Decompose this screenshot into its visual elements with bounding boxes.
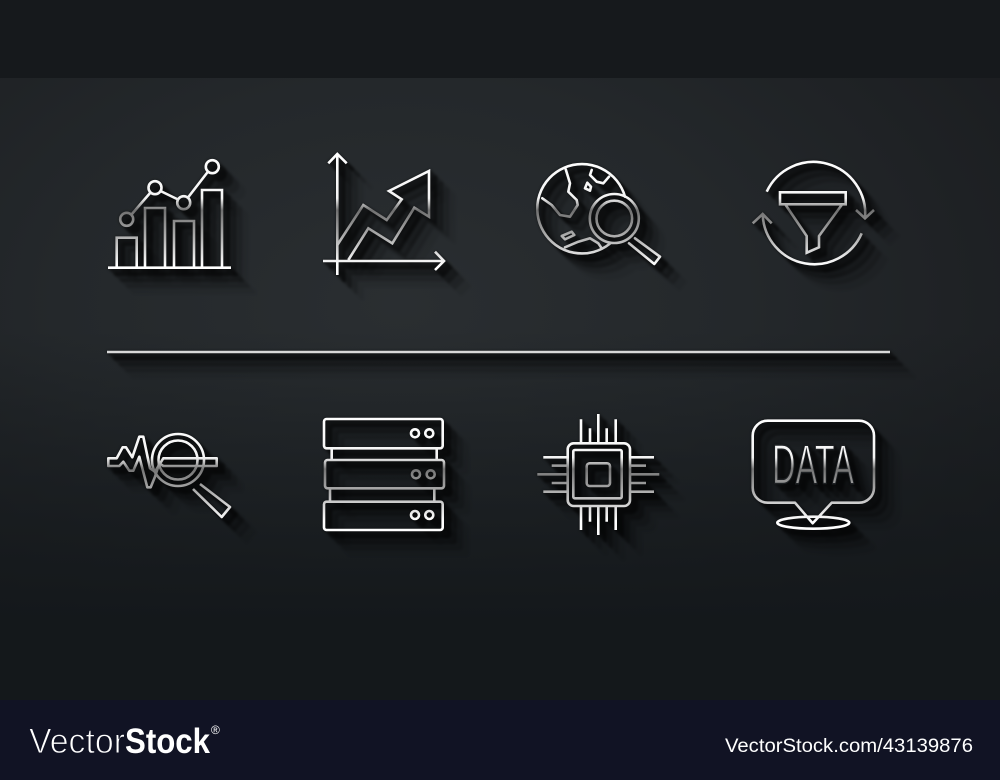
trend line <box>132 172 208 214</box>
image id: VectorStock.com/43139876 <box>725 735 973 757</box>
base ellipse <box>777 517 849 529</box>
icon: globe with magnifier <box>537 164 660 264</box>
cycle arrow top <box>767 162 874 218</box>
footer strip <box>0 622 1000 700</box>
bubble outline <box>753 421 874 523</box>
horizontal axis <box>323 252 444 270</box>
continents <box>542 169 609 248</box>
vertical axis <box>328 154 347 275</box>
server unit middle <box>325 460 444 488</box>
divider line <box>107 351 890 353</box>
connectors <box>330 448 437 502</box>
icon: processor chip <box>537 414 659 535</box>
bubble label: DATA <box>772 432 854 495</box>
globe outline <box>537 164 625 253</box>
brand logo: ® <box>211 723 220 737</box>
icon: growth arrow on axes <box>323 154 444 275</box>
server unit bottom <box>324 502 443 530</box>
footer banner <box>0 700 1000 780</box>
funnel <box>780 192 846 253</box>
pulse wave <box>108 437 217 487</box>
baseline <box>108 266 231 269</box>
top band <box>0 0 1000 78</box>
icon: server stack <box>324 419 444 530</box>
icon: DATA speech bubble <box>753 421 874 529</box>
chip pins <box>537 414 659 535</box>
brand logo: Vector <box>29 722 125 761</box>
brand logo: Stock <box>125 722 210 761</box>
rising arrow <box>337 171 429 260</box>
trend points <box>120 160 219 226</box>
bars <box>117 190 222 268</box>
cycle arrow bottom <box>753 214 862 264</box>
magnifier <box>152 434 230 517</box>
server unit top <box>324 419 443 448</box>
main background panel <box>0 78 1000 700</box>
icon: magnifier over pulse wave <box>108 434 230 517</box>
icon: bar chart with trend line <box>108 160 231 268</box>
magnifier <box>590 194 660 264</box>
chip body <box>568 443 630 506</box>
icon: funnel with refresh arrows <box>753 162 874 264</box>
